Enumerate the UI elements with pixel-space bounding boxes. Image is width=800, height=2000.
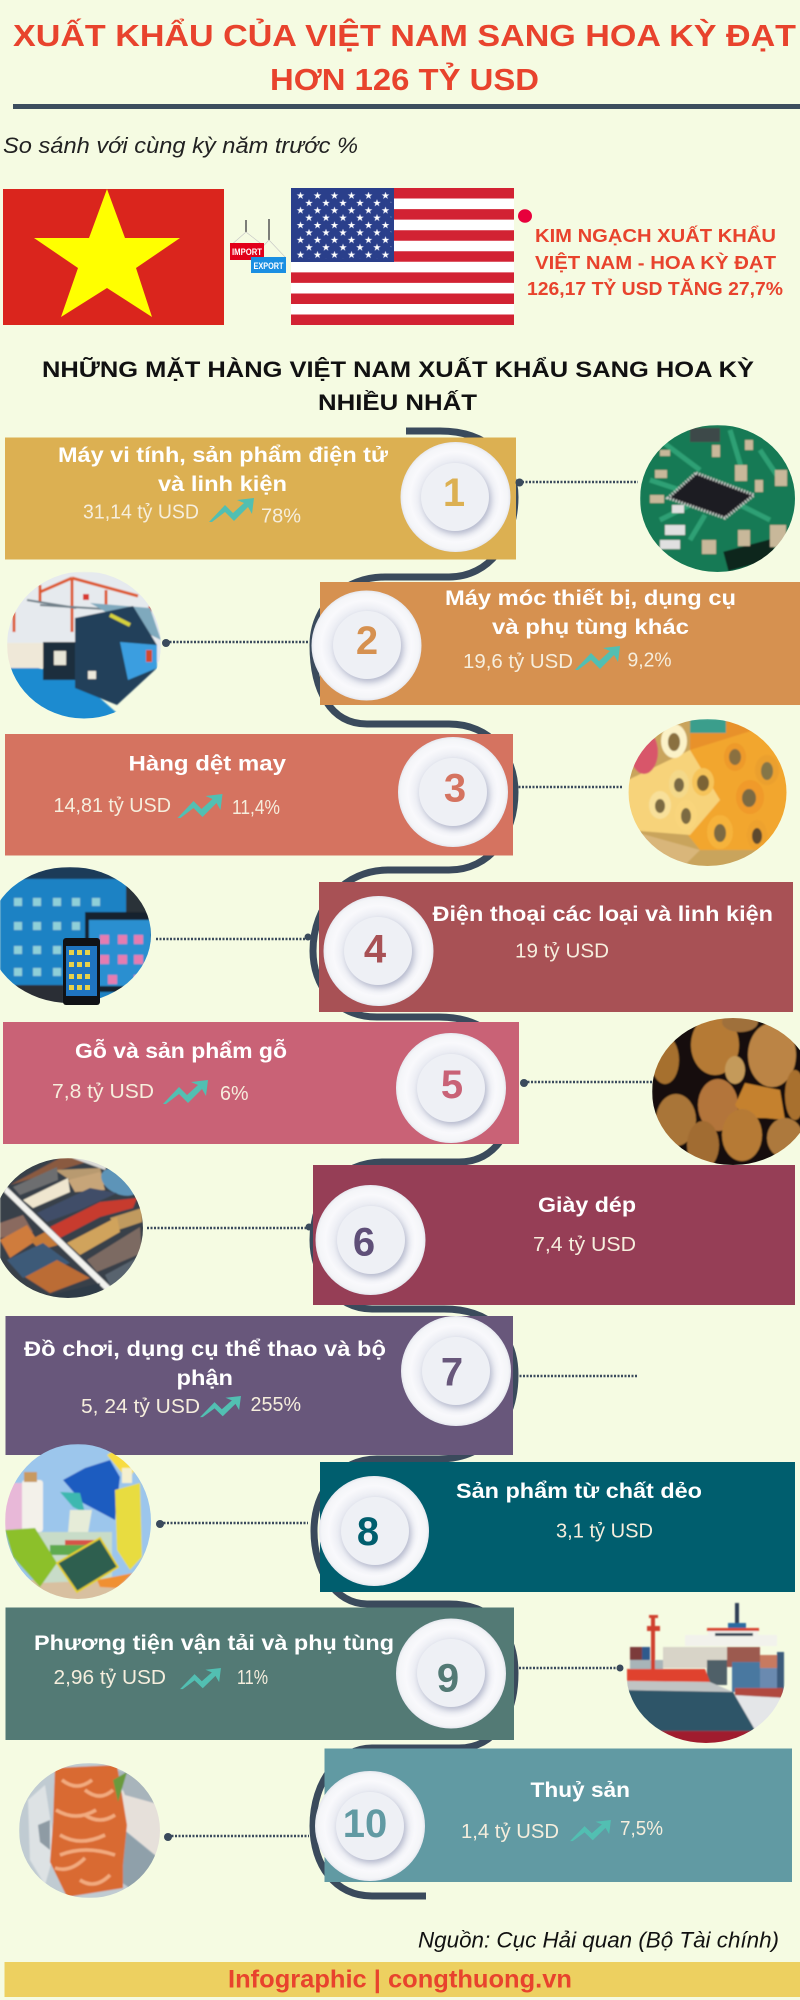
icon: timber logs photo: [651, 1012, 800, 1169]
icon: shoes on shelf photo: [0, 1158, 144, 1300]
panel: item 3: 3: [444, 766, 466, 810]
panel: item 2: 19,6 tỷ USD: [463, 651, 573, 673]
icon: red dot: [518, 209, 532, 223]
panel: item 8: Sản phẩm từ chất dẻo: [456, 1480, 702, 1503]
icon: import export signs: EXPORT: [254, 261, 284, 271]
footer bar: [4, 1962, 800, 1997]
panel: item 1: và linh kiện: [158, 473, 287, 496]
icon: fabric rolls photo: [628, 719, 790, 870]
panel: item 5: 5: [441, 1063, 463, 1107]
panel: item 10: 7,5%: [620, 1818, 663, 1840]
panel: item 2: 9,2%: [628, 650, 672, 672]
icon: plastic products photo: [5, 1444, 153, 1600]
panel: item 7: [6, 1316, 513, 1455]
panel: item 7: 255%: [250, 1394, 301, 1416]
icon: seafood photo: [19, 1763, 161, 1898]
heading: top exports: NHIỀU NHẤT: [318, 390, 478, 415]
callout: export turnover: VIỆT NAM - HOA KỲ ĐẠT: [535, 252, 776, 273]
panel: item 5: 7,8 tỷ USD: [52, 1081, 154, 1103]
panel: item 10: Thuỷ sản: [530, 1779, 630, 1802]
panel: item 2: 2: [356, 619, 378, 663]
panel: item 5: Gỗ và sản phẩm gỗ: [75, 1039, 287, 1063]
panel: item 2: Máy móc thiết bị, dụng cụ: [445, 587, 736, 610]
panel: item 5: 6%: [220, 1083, 249, 1105]
panel: item 2: và phụ tùng khác: [492, 616, 689, 639]
heading: top exports: [42, 357, 754, 415]
panel: item 8: 8: [357, 1510, 379, 1554]
footer bar: Infographic | congthuong.vn: [228, 1966, 572, 1994]
panel: item 9: Phương tiện vận tải và phụ tùng: [34, 1632, 394, 1655]
panel: item 9: 11%: [237, 1667, 268, 1689]
panel: item 4: 4: [364, 928, 387, 972]
panel: item 1: 78%: [261, 506, 301, 528]
panel: item 1: [5, 438, 516, 560]
title: XUẤT KHẨU CỦA VIỆT NAM SANG HOA KỲ ĐẠT: [13, 17, 796, 53]
dotted leader lines: [147, 478, 652, 1841]
title: HƠN 126 TỶ USD: [270, 62, 539, 97]
panel: item 10: 1,4 tỷ USD: [461, 1821, 559, 1843]
panel: item 7: phận: [176, 1367, 233, 1390]
source: Nguồn: Cục Hải quan (Bộ Tài chính): [418, 1928, 779, 1952]
subtitle: So sánh với cùng kỳ năm trước %: [3, 133, 358, 158]
callout: export turnover: [527, 225, 783, 299]
panel: item 4: [319, 882, 793, 1012]
panel: item 6: 6: [353, 1221, 375, 1265]
panel: item 6: 7,4 tỷ USD: [533, 1234, 636, 1256]
callout: export turnover: KIM NGẠCH XUẤT KHẨU: [535, 225, 776, 246]
panel: item 7: Đồ chơi, dụng cụ thể thao và bộ: [24, 1338, 386, 1361]
panel: item 3: [5, 734, 513, 856]
panel: item 1: Máy vi tính, sản phẩm điện tử: [58, 444, 389, 467]
panel: item 1: 1: [443, 471, 465, 515]
panel: item 4: Điện thoại các loại và linh kiện: [432, 903, 773, 926]
panel: item 3: 11,4%: [232, 797, 280, 819]
icon: import export signs: [230, 219, 286, 273]
panel: item 4: 19 tỷ USD: [515, 941, 609, 963]
icon: USA flag: [291, 188, 514, 325]
panel: item 10: 10: [343, 1802, 387, 1846]
panel: item 6: [313, 1165, 795, 1305]
panel: item 7: 5, 24 tỷ USD: [81, 1396, 200, 1418]
icon: tablets and phones photo: [0, 867, 155, 1007]
icon: container ship photo: [620, 1603, 786, 1745]
panel: item 8: [319, 1462, 795, 1592]
icon: import export signs: IMPORT: [232, 247, 262, 257]
panel: item 1: 31,14 tỷ USD: [83, 502, 199, 524]
title: [13, 17, 796, 97]
icon: circuit board photo: [640, 425, 796, 573]
panel: item 2: [312, 582, 800, 705]
panel: item 9: 2,96 tỷ USD: [54, 1667, 166, 1689]
panel: item 10: [315, 1748, 792, 1882]
callout: export turnover: 126,17 TỶ USD TĂNG 27,7%: [527, 278, 783, 299]
panel: item 6: Giày dép: [538, 1194, 636, 1217]
panel: item 3: 14,81 tỷ USD: [54, 795, 171, 817]
icon: machinery photo: [7, 572, 161, 720]
panel: item 3: Hàng dệt may: [128, 752, 286, 776]
heading: top exports: NHỮNG MẶT HÀNG VIỆT NAM XUẤT KHẨU SANG HOA KỲ: [42, 357, 754, 382]
panel: item 5: [3, 1022, 519, 1144]
panel: item 7: 7: [441, 1351, 463, 1395]
connector: winding timeline: [313, 431, 515, 1896]
panel: item 8: 3,1 tỷ USD: [556, 1521, 653, 1543]
panel: item 9: 9: [437, 1657, 459, 1701]
panel: item 9: [6, 1608, 514, 1740]
icon: Vietnam flag: [3, 189, 224, 325]
